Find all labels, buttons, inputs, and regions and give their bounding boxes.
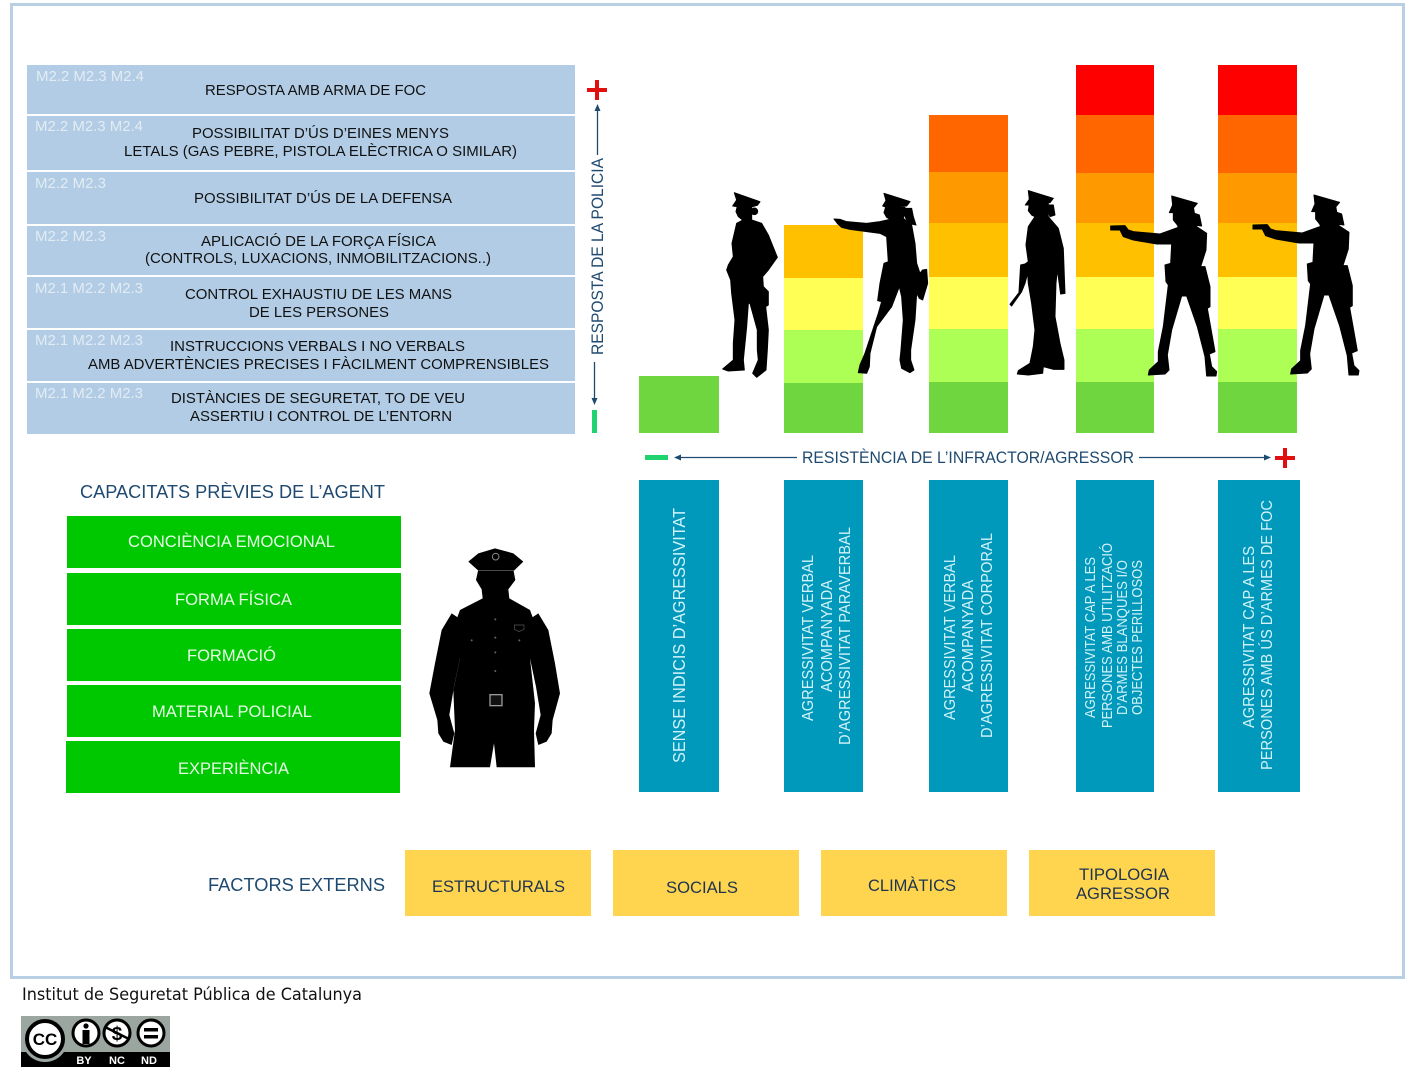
response row: physical force: APLICACIÓ DE LA FORÇA FÍSICA (201, 233, 436, 250)
icon: creative commons BY-NC-ND badge: NC (109, 1055, 125, 1067)
factor: aggressor typology (1029, 850, 1215, 916)
factor: climatic (821, 850, 1007, 916)
stack 4 (1076, 65, 1154, 433)
heading: CAPACITATS PRÈVIES DE L’AGENT (80, 482, 385, 502)
icon: pointing officer silhouette (834, 193, 928, 373)
stack 3 (929, 115, 1008, 433)
factor: structural (405, 850, 591, 916)
aggression column 5: PERSONES AMB ÚS D’ARMES DE FOC (1257, 500, 1276, 770)
icon: creative commons BY-NC-ND badge: $ (112, 1024, 123, 1045)
aggression column 2: D’AGRESSIVITAT PARAVERBAL (837, 527, 854, 745)
response row: physical force: M2.2 M2.3 (35, 228, 106, 245)
capacity: training: FORMACIÓ (187, 646, 276, 665)
response row: verbal instructions (27, 330, 575, 381)
aggression column 5: AGRESSIVITAT CAP A LES (1241, 546, 1258, 728)
response row: hand control: CONTROL EXHAUSTIU DE LES MANS (185, 286, 452, 303)
factor: social: SOCIALS (666, 878, 738, 897)
icon: creative commons BY-NC-ND badge: CC (33, 1030, 57, 1049)
capacity: fitness: FORMA FÍSICA (175, 590, 292, 609)
vertical axis: police response (587, 80, 607, 433)
horizontal axis: offender resistance (645, 448, 1295, 468)
credit text: Institut de Seguretat Pública de Catalunya (22, 985, 362, 1005)
response row: firearm: M2.2 M2.3 M2.4 (36, 68, 144, 85)
icon: male officer silhouette (429, 548, 560, 767)
stack 1 (639, 376, 719, 433)
response row: less lethal tools: LETALS (GAS PEBRE, PISTOLA ELÈCTRICA O SIMILAR) (124, 143, 517, 160)
response row: baton (27, 172, 575, 224)
response row: hand control (27, 277, 575, 328)
icon: creative commons BY-NC-ND badge: ND (141, 1055, 157, 1067)
response row: baton: M2.2 M2.3 (35, 175, 106, 192)
capacity: emotional awareness (67, 516, 401, 568)
aggression column 3: AGRESSIVITAT VERBAL (942, 555, 959, 720)
aggression column 1 (639, 480, 719, 792)
capacity: police equipment (67, 685, 401, 737)
panel: external factors (208, 850, 1215, 916)
aggression column 4: OBJECTES PERILLOSOS (1130, 560, 1146, 715)
vertical axis: police response: RESPOSTA DE LA POLICIA (589, 158, 607, 355)
aggression column 4: AGRESSIVITAT CAP A LES (1083, 557, 1099, 718)
aggression column 3: D’AGRESSIVITAT CORPORAL (979, 533, 996, 738)
response row: physical force: (CONTROLS, LUXACIONS, INMOBILITZACIONS..) (145, 250, 491, 267)
aggression column 3: ACOMPANYADA (960, 580, 977, 692)
response row: physical force (27, 226, 575, 275)
capacity: experience: EXPERIÈNCIA (178, 759, 289, 778)
capacity: training (67, 629, 401, 681)
factor: social (613, 850, 799, 916)
aggression column 2: AGRESSIVITAT VERBAL (800, 555, 817, 721)
factor: structural: ESTRUCTURALS (432, 877, 565, 896)
response row: verbal instructions: M2.1 M2.2 M2.3 (35, 332, 143, 349)
response row: safety distances: DISTÀNCIES DE SEGURETAT, TO DE VEU (171, 390, 465, 407)
aggression column 4: PERSONES AMB UTILITZACIÓ (1099, 543, 1116, 728)
response row: firearm (27, 65, 575, 114)
response row: less lethal tools: M2.2 M2.3 M2.4 (35, 118, 143, 135)
response row: verbal instructions: INSTRUCCIONS VERBALS I NO VERBALS (170, 338, 465, 355)
aggression column 2 (784, 480, 863, 792)
icon: officer aiming pistol, stack 5 (1253, 195, 1359, 375)
icon: standing officer silhouette (723, 193, 777, 377)
response row: verbal instructions: AMB ADVERTÈNCIES PRECISES I FÀCILMENT COMPRENSIBLES (88, 356, 549, 373)
response row: less lethal tools (27, 116, 575, 170)
aggression column 4: D’ARMES BLANQUES I/O (1115, 560, 1131, 715)
icon: officer walking with baton (1010, 191, 1065, 375)
factor: climatic: CLIMÀTICS (868, 876, 956, 895)
icon: creative commons BY-NC-ND badge: BY (76, 1055, 92, 1067)
factor: aggressor typology: AGRESSOR (1076, 884, 1170, 903)
panel: police response levels (27, 65, 575, 434)
response row: firearm: RESPOSTA AMB ARMA DE FOC (205, 82, 426, 99)
aggression column 3 (929, 480, 1008, 792)
chart: resistance level stacks (639, 65, 1297, 433)
panel: agent prior capacities (66, 482, 401, 793)
response row: safety distances: ASSERTIU I CONTROL DE L’ENTORN (190, 408, 452, 425)
panel: aggression levels (639, 480, 1300, 792)
response row: safety distances (27, 383, 575, 434)
capacity: fitness (67, 573, 401, 625)
icon: creative commons BY-NC-ND badge (21, 1016, 170, 1067)
capacity: police equipment: MATERIAL POLICIAL (152, 703, 312, 721)
aggression column 1: SENSE INDICIS D’AGRESSIVITAT (669, 508, 689, 763)
capacity: emotional awareness: CONCIÈNCIA EMOCIONAL (128, 532, 335, 551)
factor: aggressor typology: TIPOLOGIA (1079, 865, 1170, 884)
icon: officer aiming pistol, stack 4 (1111, 196, 1217, 376)
response row: baton: POSSIBILITAT D’ÚS DE LA DEFENSA (194, 190, 452, 207)
horizontal axis: offender resistance: RESISTÈNCIA DE L’INFRACTOR/AGRESSOR (802, 448, 1134, 467)
stack 5 (1218, 65, 1297, 433)
stack 2 (784, 225, 863, 433)
aggression column 5 (1218, 480, 1300, 792)
response row: hand control: M2.1 M2.2 M2.3 (35, 280, 143, 297)
capacity: experience (66, 741, 400, 793)
response row: safety distances: M2.1 M2.2 M2.3 (35, 385, 143, 402)
aggression column 2: ACOMPANYADA (819, 580, 836, 692)
response row: hand control: DE LES PERSONES (249, 304, 389, 321)
response row: less lethal tools: POSSIBILITAT D’ÚS D’EINES MENYS (192, 125, 449, 142)
aggression column 4 (1076, 480, 1154, 792)
heading: FACTORS EXTERNS (208, 875, 385, 895)
